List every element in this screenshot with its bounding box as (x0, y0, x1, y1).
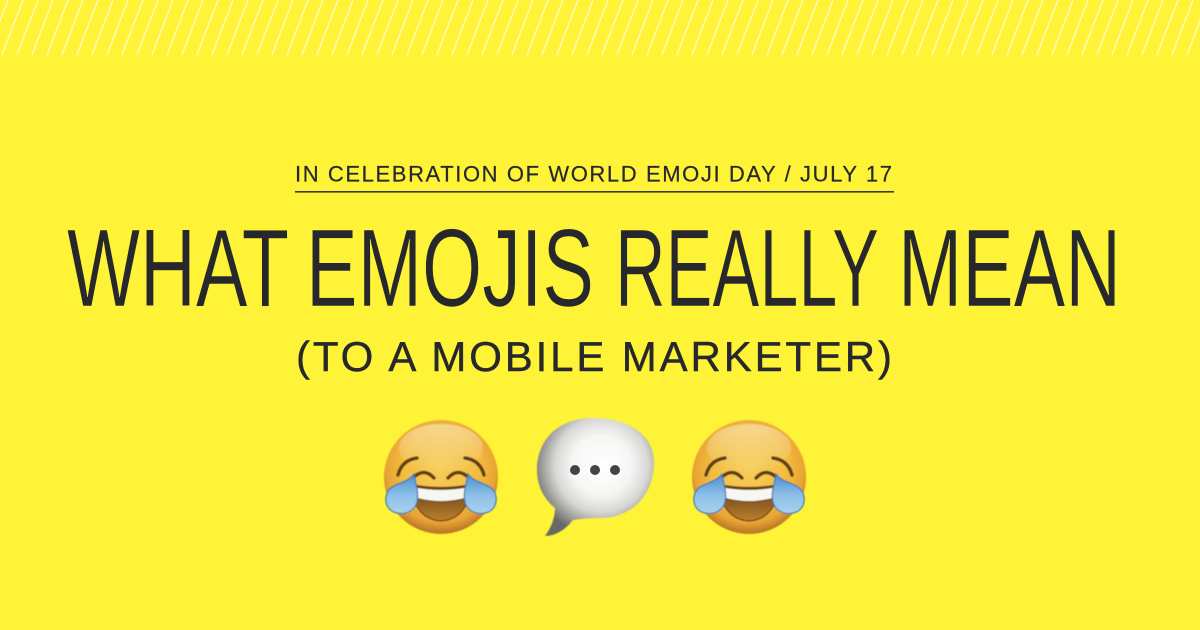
title: EMOJIS (306, 207, 594, 330)
icon: laughing face with tears right (692, 420, 806, 534)
striped top band (0, 0, 1200, 55)
title: REALLY (615, 207, 879, 330)
icon: speech bubble with dots (537, 418, 654, 536)
title: WHAT (67, 207, 289, 330)
subtitle: (TO A MOBILE MARKETER) (296, 333, 892, 380)
title (67, 207, 1121, 330)
eyebrow heading: IN CELEBRATION OF WORLD EMOJI DAY / JULY 17 (295, 162, 892, 186)
icon: laughing face with tears left (384, 420, 498, 534)
